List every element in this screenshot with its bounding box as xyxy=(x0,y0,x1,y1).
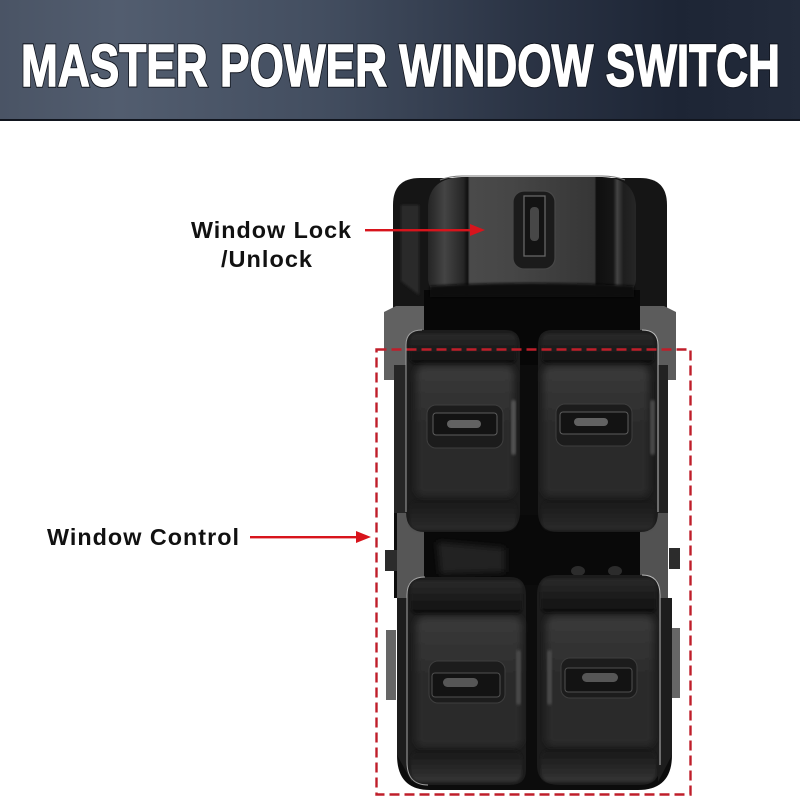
lock knob xyxy=(428,176,636,297)
rocker: upper left xyxy=(406,330,520,532)
rocker: upper right xyxy=(538,330,658,532)
side tabs lower xyxy=(385,548,680,700)
arrow: to window lock xyxy=(365,224,485,236)
centre dark band xyxy=(424,515,640,585)
upper housing xyxy=(393,178,667,345)
dashed highlight: window control area xyxy=(376,350,690,794)
dark neck xyxy=(424,290,640,365)
rocker: lower left xyxy=(407,577,526,785)
label: window lock/unlock: Window Lock xyxy=(191,217,352,243)
label: window lock/unlock xyxy=(191,217,352,272)
title banner xyxy=(0,0,800,121)
side tabs upper xyxy=(384,306,676,380)
rocker: lower right xyxy=(537,575,660,785)
product photo: master window switch xyxy=(384,176,680,790)
main lower body xyxy=(394,365,672,790)
lock slot xyxy=(513,191,555,269)
arrow: to window control xyxy=(250,531,371,543)
label: window control: Window Control xyxy=(47,524,240,550)
label: window lock/unlock: /Unlock xyxy=(221,246,313,272)
